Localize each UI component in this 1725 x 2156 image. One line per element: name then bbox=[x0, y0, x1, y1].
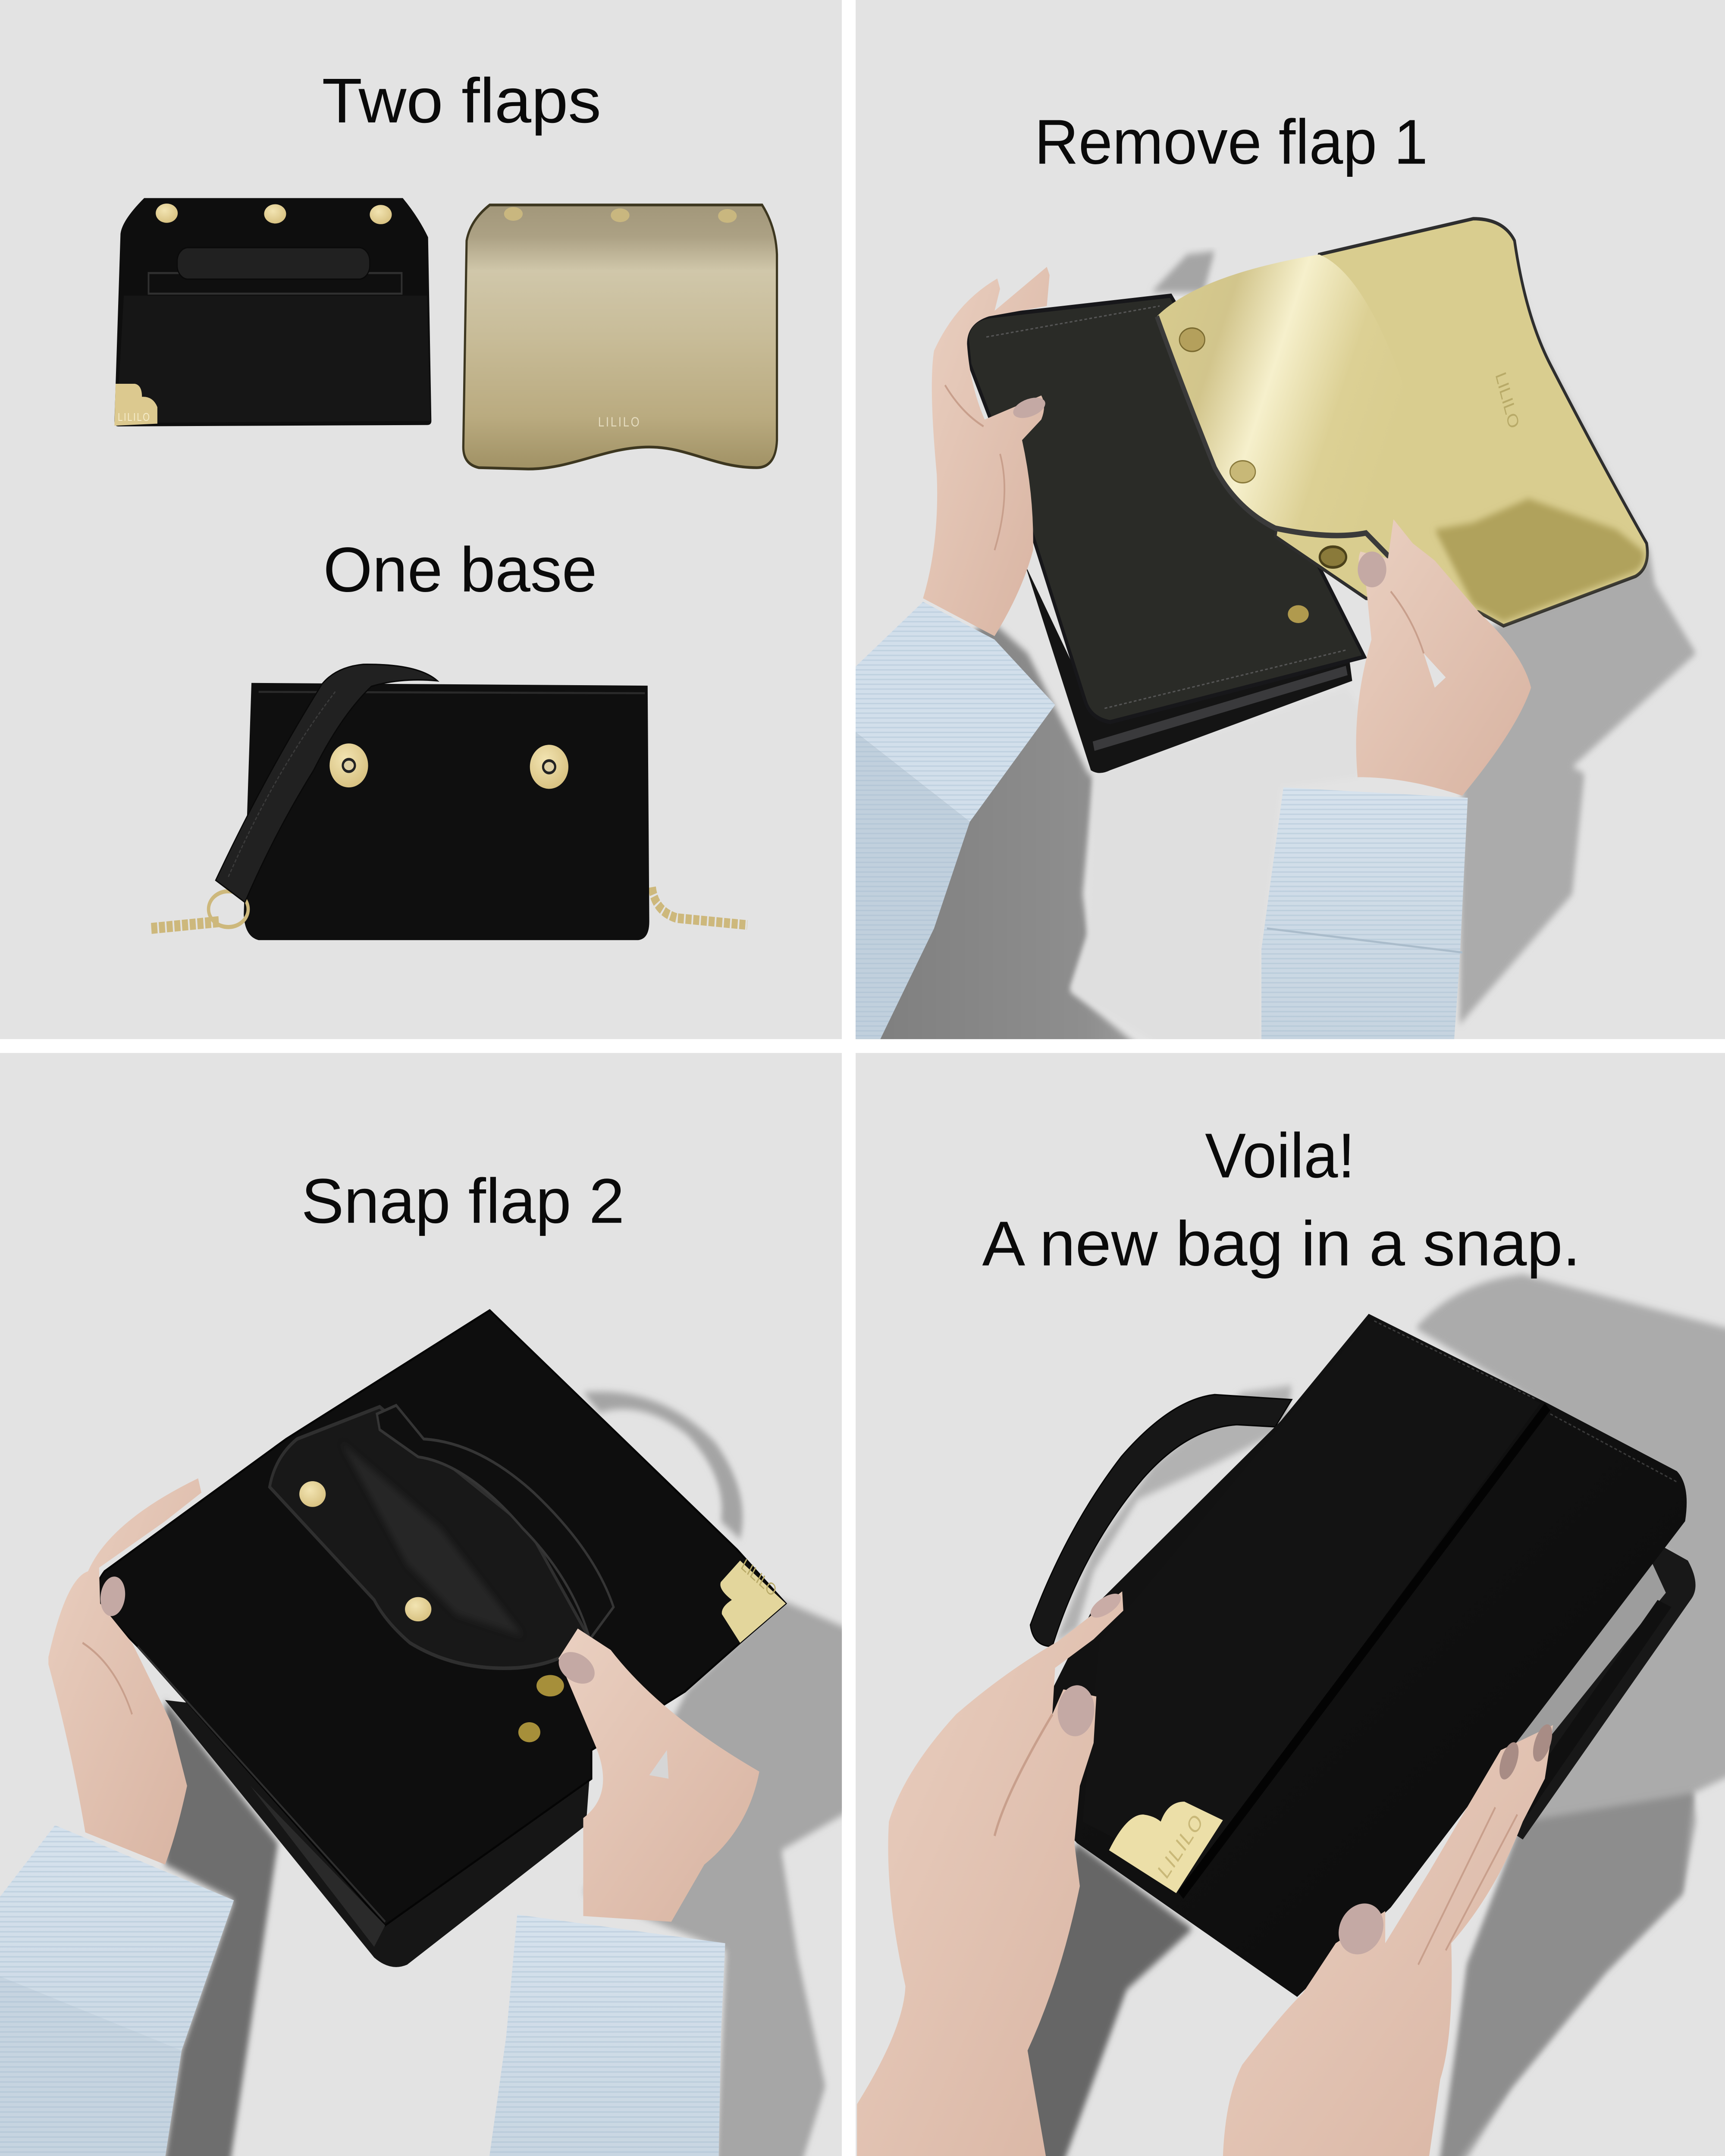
gold flap removed: LILILO bbox=[1492, 370, 1523, 431]
gold corner plate bbox=[720, 1555, 786, 1643]
heading: two flaps: Two flaps bbox=[322, 66, 601, 136]
left hand bbox=[857, 1589, 1123, 2156]
left hand bbox=[923, 267, 1050, 636]
gold flap bbox=[463, 205, 777, 469]
gold corner plate bbox=[1109, 1802, 1223, 1893]
right hand bbox=[1223, 1720, 1556, 2156]
right hand bbox=[555, 1629, 759, 1922]
black flap with handle bbox=[114, 198, 431, 426]
cast shadows bbox=[829, 227, 1696, 1073]
bag body bbox=[1011, 1314, 1687, 1997]
gold flap: LILILO bbox=[598, 414, 641, 430]
gold flap removed bbox=[1157, 219, 1647, 626]
heading: snap flap 2: Snap flap 2 bbox=[301, 1166, 624, 1237]
left sleeve bbox=[0, 1825, 234, 2156]
heading: remove flap 1: Remove flap 1 bbox=[1035, 107, 1428, 178]
cast shadows bbox=[160, 1392, 880, 2156]
right sleeve bbox=[1261, 787, 1468, 1042]
bag back layer bbox=[1495, 1539, 1696, 1839]
heading: one base: One base bbox=[323, 535, 597, 605]
left sleeve bbox=[851, 602, 1055, 1042]
panel: remove flap 1 bbox=[829, 0, 1725, 1073]
base bag bbox=[151, 664, 747, 940]
right hand bbox=[1355, 519, 1531, 796]
gold corner plate: LILILO bbox=[1154, 1808, 1208, 1883]
heading: voila: Voila! bbox=[1205, 1120, 1355, 1191]
black base bag bbox=[967, 296, 1364, 773]
black bag body bbox=[96, 1310, 786, 1967]
panel: snap flap 2 bbox=[0, 1053, 880, 2156]
cast shadows bbox=[896, 1275, 1725, 2156]
heading: a new bag in a snap: A new bag in a snap. bbox=[982, 1209, 1581, 1279]
right sleeve bbox=[484, 1915, 725, 2156]
folded black flap with handle bbox=[270, 1405, 614, 1668]
left hand bbox=[48, 1478, 201, 1865]
bag handle bbox=[1030, 1395, 1292, 1646]
panel: two flaps and one base bbox=[0, 0, 842, 1039]
black flap with handle: LILILO bbox=[118, 411, 151, 423]
panel: voila, a new bag in a snap bbox=[856, 1053, 1725, 2156]
gold corner plate: LILILO bbox=[738, 1555, 779, 1601]
